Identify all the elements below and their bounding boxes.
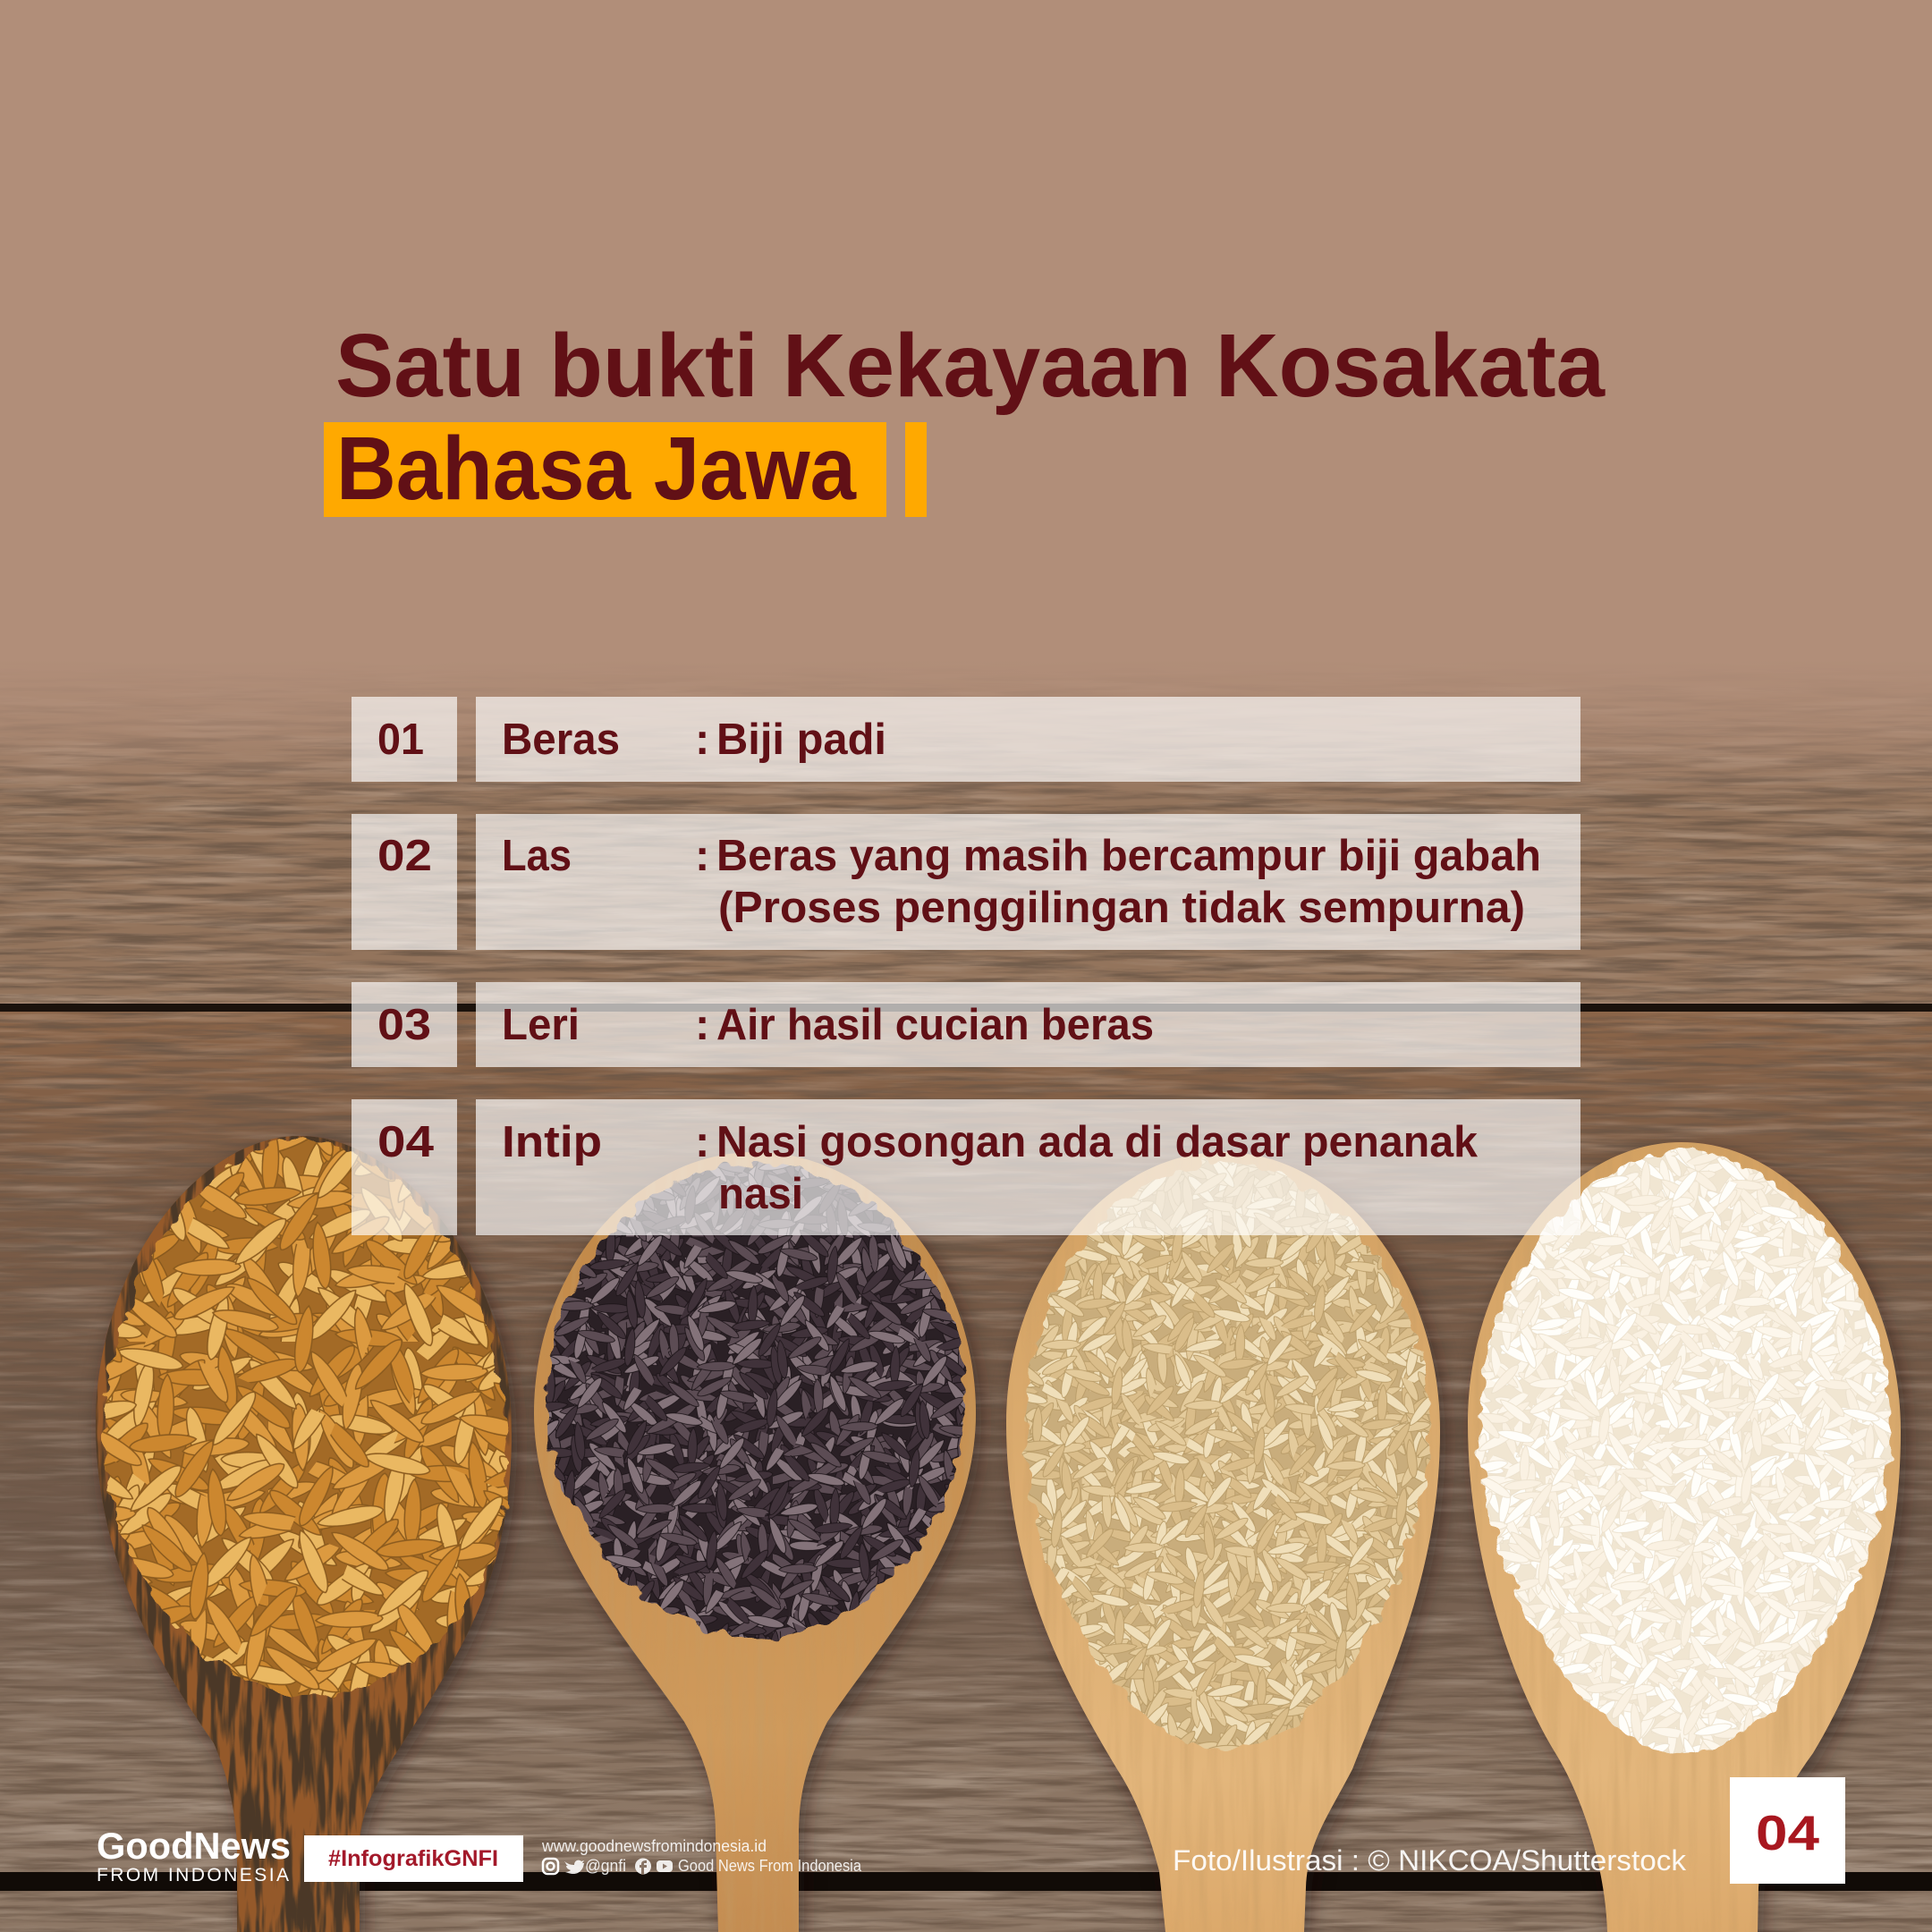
vocabulary row 03: 03: [377, 1001, 431, 1049]
page number: [1730, 1777, 1845, 1884]
spoon: palm wood with unhusked paddy: [89, 1127, 519, 1932]
page name: Good News From Indonesia: [678, 1857, 862, 1875]
spoon: bamboo with black rice: [528, 1145, 984, 1932]
vocabulary row 04: Intip: [502, 1118, 602, 1166]
title line two: Bahasa Jawa: [336, 419, 857, 519]
vocabulary row 01: [352, 697, 1580, 782]
vocabulary row 03: [352, 982, 1580, 1067]
website: www.goodnewsfromindonesia.id: [541, 1837, 767, 1855]
top colour fade panel: [0, 0, 1932, 805]
hashtag badge: #InfografikGNFI: [328, 1846, 498, 1871]
logo: GoodNews From Indonesia: GoodNews: [97, 1825, 291, 1867]
title line one: Satu bukti Kekayaan Kosakata: [335, 316, 1606, 416]
vocabulary row 04: Nasi gosongan ada di dasar penanak: [716, 1118, 1479, 1166]
vocabulary row 02: 02: [377, 832, 432, 880]
vocabulary row 03: Air hasil cucian beras: [716, 1001, 1154, 1049]
vocabulary row 01: Beras: [502, 716, 620, 764]
vocabulary row 03: Leri: [502, 1001, 580, 1049]
vocabulary row 02: [352, 814, 1580, 950]
background: wood table photo: [0, 626, 1932, 1932]
vocabulary row 01: 01: [377, 716, 424, 764]
title highlight bar: [324, 422, 886, 517]
vocabulary row 01: :: [695, 716, 709, 764]
hashtag badge: [304, 1835, 523, 1882]
vocabulary row 04: 04: [377, 1118, 434, 1166]
spoon: bamboo with white rice: [1463, 1136, 1906, 1932]
vocabulary row 02: Beras yang masih bercampur biji gabah: [716, 832, 1541, 880]
icon: facebook: [635, 1859, 651, 1875]
icon: twitter: [564, 1860, 584, 1874]
social links: [541, 1837, 862, 1875]
vocabulary row 03: :: [695, 1001, 709, 1049]
photo credit: Foto/Ilustrasi : © NIKCOA/Shutterstock: [1173, 1844, 1687, 1877]
vocabulary row 02: Las: [502, 832, 572, 880]
vocabulary row 02: :: [695, 832, 709, 880]
spoon: bamboo with brown rice: [1002, 1145, 1449, 1932]
vocabulary row 02: (Proses penggilingan tidak sempurna): [718, 884, 1525, 932]
vocabulary row 04: nasi: [718, 1170, 803, 1218]
vocabulary row 04: [352, 1099, 1580, 1235]
icon: youtube: [657, 1860, 673, 1872]
icon: instagram: [543, 1859, 558, 1874]
title highlight accent: [905, 422, 927, 517]
logo: GoodNews From Indonesia: [97, 1825, 291, 1885]
handle: @gnfi: [585, 1857, 626, 1875]
vocabulary row 01: Biji padi: [716, 716, 886, 764]
logo: GoodNews From Indonesia: FROM INDONESIA: [97, 1865, 289, 1885]
page number: 04: [1756, 1805, 1819, 1860]
vocabulary row 04: :: [695, 1118, 709, 1166]
title: [324, 316, 1606, 519]
